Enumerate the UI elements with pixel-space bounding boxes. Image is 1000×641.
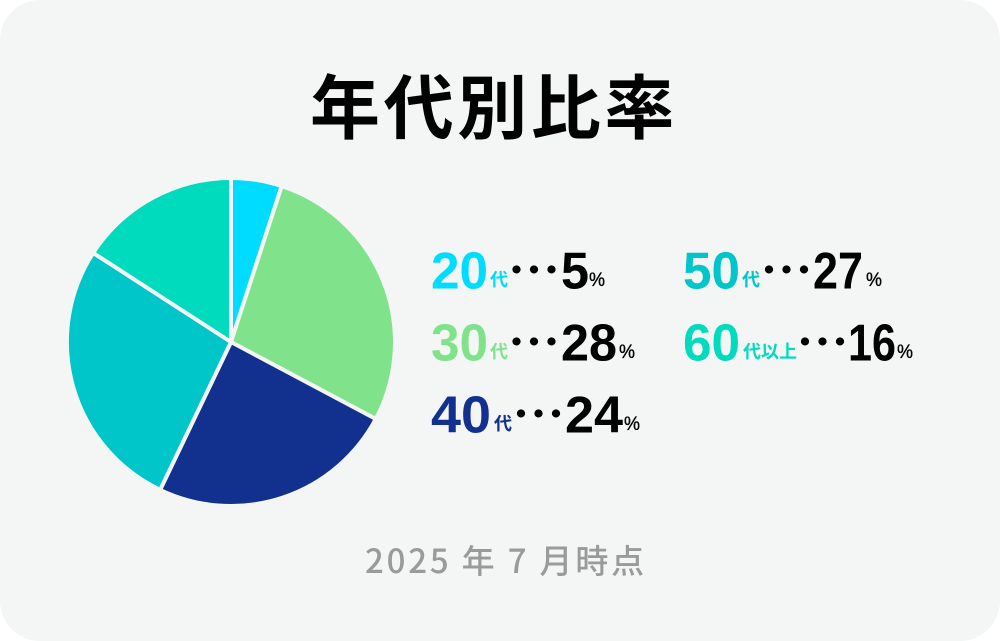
pie chart: [67, 178, 395, 506]
legend: 60代以上 16%: 60: [683, 314, 740, 372]
legend: 30代 28%: ・・・: [500, 318, 557, 364]
legend: 60代以上 16%: [683, 314, 913, 372]
legend: 50代 27%: [683, 242, 882, 300]
pie slice: 60代以上 16%: [93, 178, 231, 342]
pie slice: 50代 27%: [67, 253, 231, 490]
pie slice: 20代 5%: [231, 178, 282, 342]
legend: 60代以上 16%: ・・・: [789, 318, 845, 364]
legend: 20代 5%: ・・・: [500, 246, 557, 292]
legend: 20代 5%: 代: [490, 266, 508, 292]
legend: 40代 24%: 24: [565, 386, 623, 444]
legend: 50代 27%: %: [866, 270, 882, 291]
legend: 60代以上 16%: 16: [848, 314, 896, 372]
legend: 40代 24%: %: [624, 414, 640, 435]
legend: 30代 28%: %: [619, 342, 635, 363]
legend: 50代 27%: 代: [742, 266, 760, 292]
legend: 30代 28%: 28: [561, 314, 617, 372]
legend: 30代 28%: 代: [490, 338, 508, 364]
legend: 40代 24%: 代: [494, 410, 512, 436]
legend: 50代 27%: 50: [683, 242, 740, 300]
legend: 30代 28%: [431, 314, 635, 372]
footnote: date: 2025 年 7 月時点: [365, 535, 647, 583]
legend: 40代 24%: ・・・: [505, 390, 561, 436]
legend: 20代 5%: [431, 242, 605, 300]
pie slice: 30代 28%: [231, 186, 395, 419]
legend: 60代以上 16%: %: [897, 342, 913, 363]
legend: 20代 5%: 5: [561, 242, 589, 300]
legend: 40代 24%: 40: [431, 386, 491, 444]
legend: 40代 24%: [431, 386, 640, 444]
title: 年代別比率: [310, 53, 678, 154]
legend: 50代 27%: ・・・: [753, 246, 809, 292]
legend: 20代 5%: %: [589, 270, 605, 291]
legend: 50代 27%: 27: [813, 242, 863, 300]
legend: 60代以上 16%: 代以上: [743, 338, 797, 364]
pie slice: 40代 24%: [160, 342, 376, 506]
legend: 30代 28%: 30: [431, 314, 488, 372]
legend: 20代 5%: 20: [431, 242, 488, 300]
